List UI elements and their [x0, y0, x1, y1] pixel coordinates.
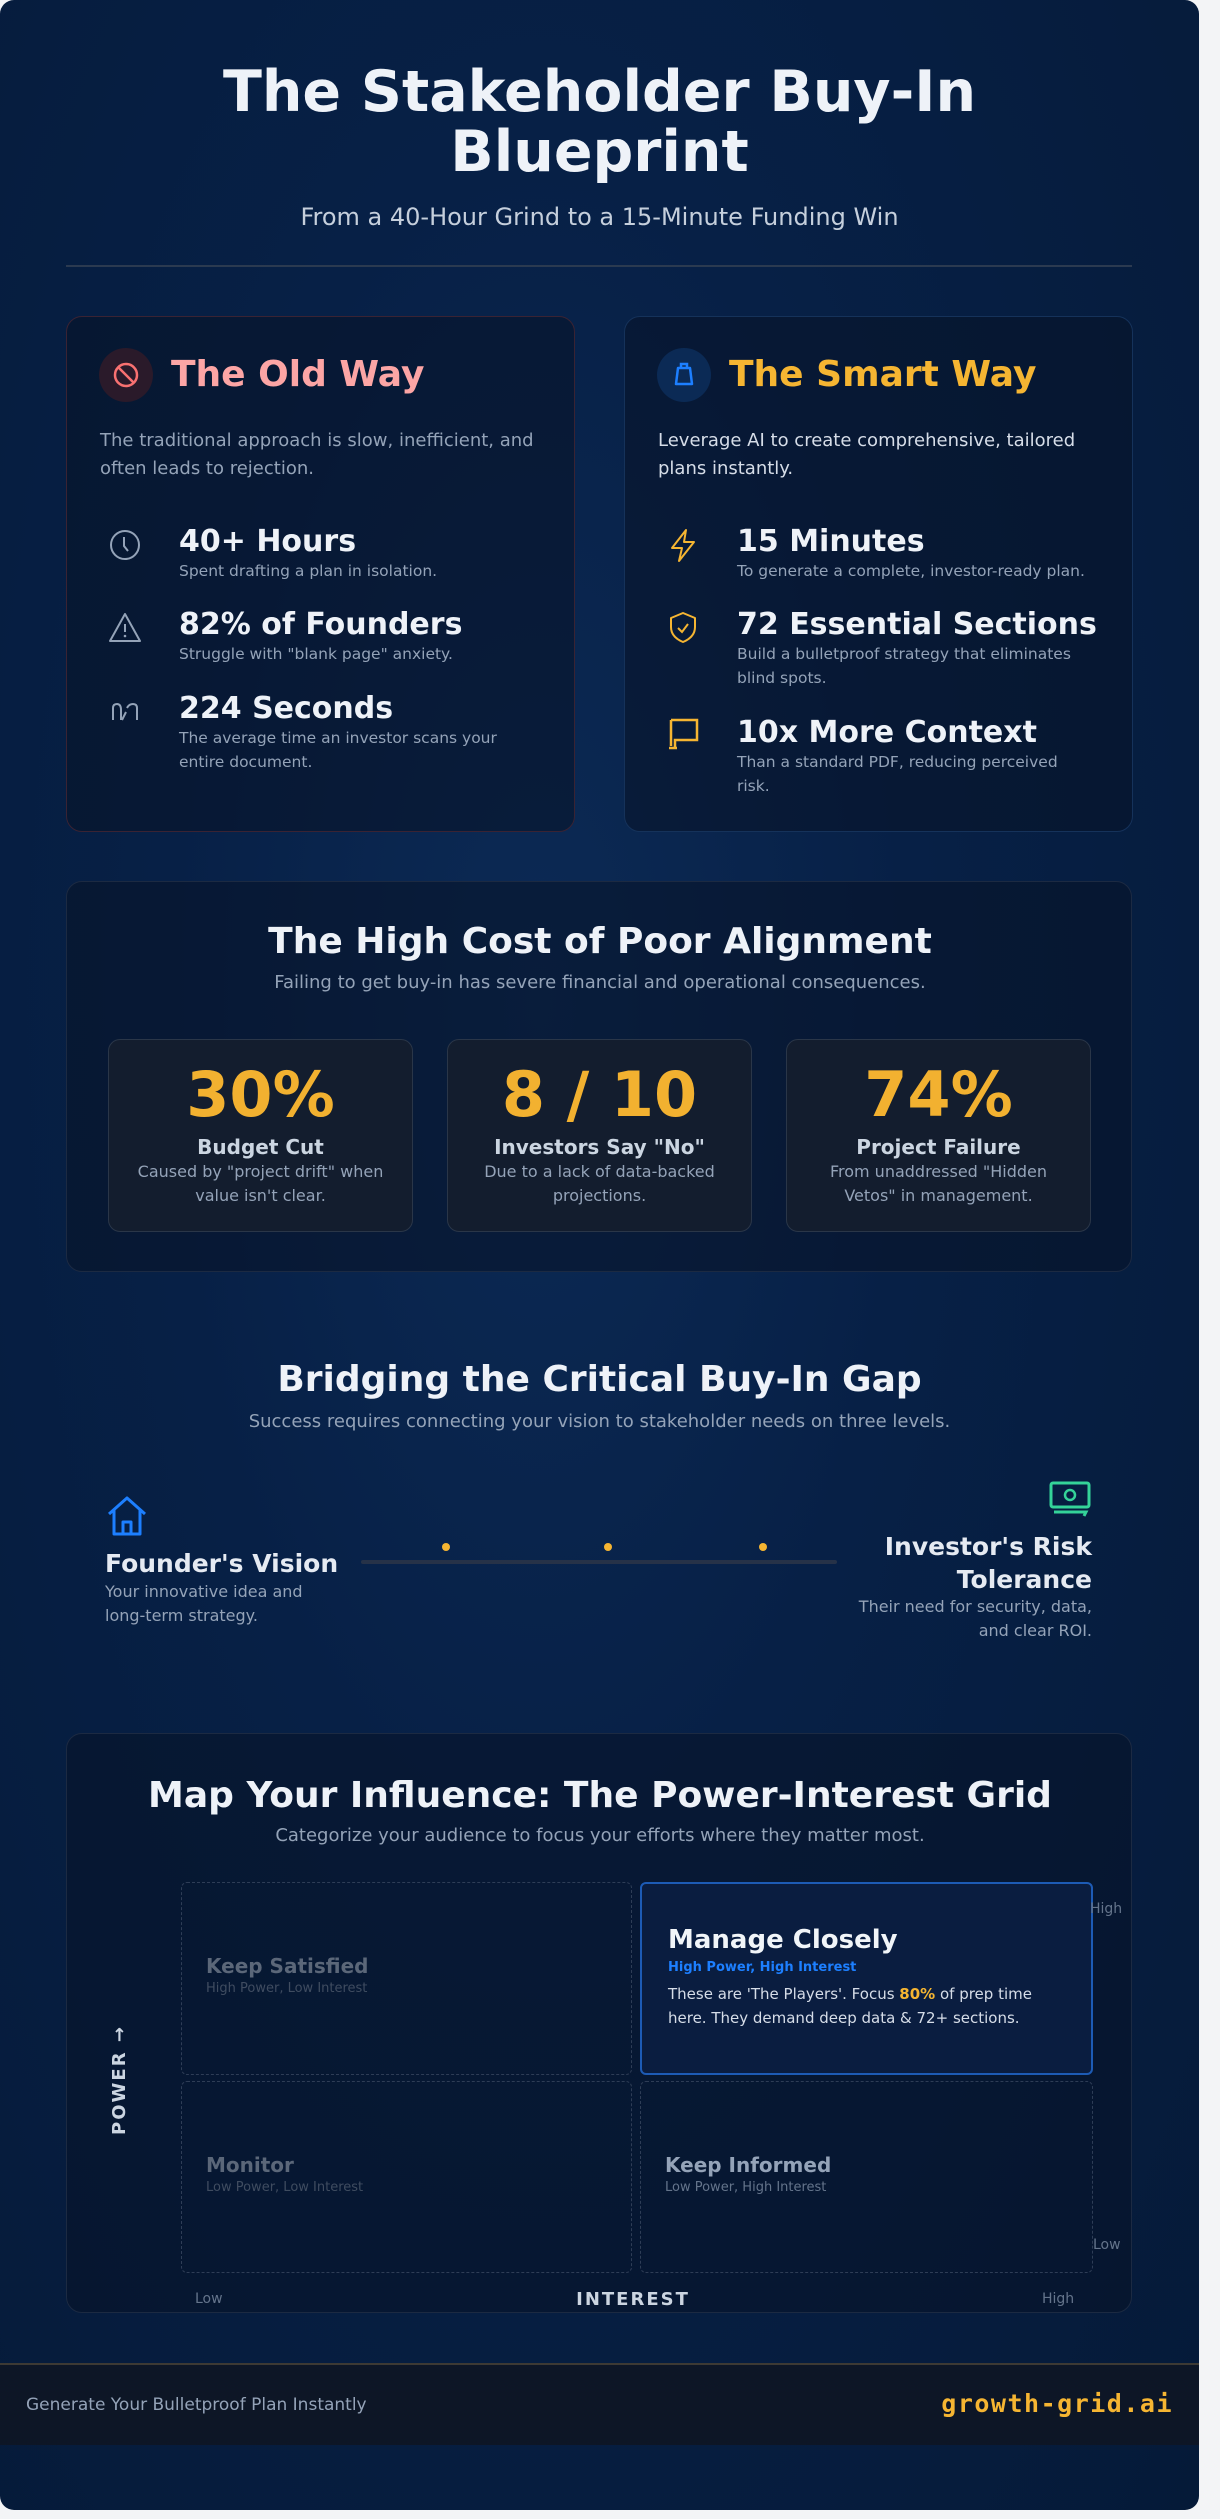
icon: money [1050, 1482, 1090, 1517]
stat: 30%: value isn't clear. [195, 1186, 326, 1205]
item: 15 minutes: 15 Minutes [737, 524, 925, 559]
block: investor's risk tolerance: Their need for security, data, and clear ROI. [859, 1597, 1092, 1640]
item: 82% of founders: Struggle with "blank page" anxiety. [179, 645, 453, 663]
stat: 30%: Budget Cut [197, 1135, 324, 1159]
item: 40+ hours [110, 524, 437, 580]
heading: the old way: The Old Way [171, 354, 424, 395]
footer [0, 2363, 1199, 2445]
item: 224 seconds: 224 Seconds [179, 691, 393, 726]
item: 82% of founders [109, 607, 462, 663]
subheading: bridging: Success requires connecting your vision to stakeholder needs on three levels. [249, 1411, 950, 1432]
panel: power-interest grid [66, 1733, 1132, 2313]
stat: 8/10: projections. [553, 1186, 646, 1205]
heading: the smart way: The Smart Way [729, 354, 1036, 395]
connector line with dots [361, 1543, 837, 1564]
icon: house [108, 1496, 146, 1536]
panel: power-interest grid: Low [1093, 2237, 1121, 2253]
quadrant: keep informed [640, 2081, 1093, 2273]
axis ticks: High [1090, 1901, 1122, 1917]
quadrant: monitor [181, 2081, 632, 2273]
stat: 74% [786, 1039, 1091, 1232]
axis label: power: POWER → [109, 2025, 130, 2135]
quadrant: monitor: Monitor [206, 2153, 294, 2177]
description: Leverage AI to create comprehensive, tailored plans instantly. [658, 430, 1075, 479]
item: 40+ hours: Spent drafting a plan in isolation. [179, 562, 437, 580]
stat: 74%: Project Failure [856, 1135, 1021, 1159]
title [223, 59, 976, 185]
item: 15 minutes [671, 524, 1085, 580]
stat: 30%: Caused by "project drift" when [138, 1162, 383, 1181]
stat: 8/10: 8 / 10 [502, 1058, 697, 1131]
axis label: interest: INTEREST [576, 2289, 690, 2310]
stat: 30%: 30% [186, 1058, 335, 1131]
panel: high cost of poor alignment [66, 881, 1132, 1272]
block: founder's vision: Founder's Vision [105, 1549, 338, 1578]
stat: 30% [108, 1039, 413, 1232]
block: founder's vision [105, 1496, 338, 1625]
block: founder's vision: Your innovative idea and long-term strategy. [105, 1582, 303, 1625]
quadrant: monitor: Low Power, Low Interest [206, 2180, 363, 2195]
heading: bridging the gap: Bridging the Critical Buy-In Gap [277, 1359, 922, 1400]
icon: bag [657, 348, 711, 402]
item: 10x context [669, 715, 1058, 795]
stat: 74%: From unaddressed "Hidden [830, 1162, 1047, 1181]
item: 15 minutes: To generate a complete, investor-ready plan. [737, 562, 1085, 580]
item: 72 sections: Build a bulletproof strategy that eliminates blind spots. [737, 645, 1071, 687]
subheading: Failing to get buy-in has severe financial and operational consequences. [274, 972, 926, 993]
panel: smart way [624, 316, 1133, 832]
block: investor's risk tolerance: Investor's Risk Tolerance [885, 1532, 1092, 1594]
description: The traditional approach is slow, inefficient, and often leads to rejection. [100, 430, 534, 479]
quadrant: manage closely: Manage Closely [668, 1925, 898, 1955]
stat: 74%: Vetos" in management. [844, 1186, 1033, 1205]
title: Blueprint [450, 119, 749, 185]
title: The Stakeholder Buy-In [223, 59, 976, 125]
stat: 8/10 [447, 1039, 752, 1232]
stat: 8/10: Due to a lack of data-backed [484, 1162, 715, 1181]
item: 82% of founders: 82% of Founders [179, 607, 462, 642]
stat: 74%: 74% [864, 1058, 1013, 1131]
quadrant: manage closely [640, 1882, 1093, 2075]
item: 10x context: Than a standard PDF, reducing perceived risk. [737, 753, 1058, 795]
footer text: Generate Your Bulletproof Plan Instantly [26, 2395, 367, 2415]
quadrant: keep satisfied: High Power, Low Interest [206, 1981, 367, 1996]
quadrant: keep informed: Keep Informed [665, 2153, 831, 2177]
panel: old way [66, 316, 575, 832]
subtitle: From a 40-Hour Grind to a 15-Minute Funding Win [300, 203, 899, 231]
panel: power-interest grid: Low [195, 2291, 223, 2307]
item: 72 sections: 72 Essential Sections [737, 607, 1097, 642]
quadrant: manage closely: These are 'The Players'. Focus 80% of prep time here. They demand deep data & 72+ sections. [668, 1985, 1032, 2027]
brand: growth-grid.ai [941, 2389, 1173, 2418]
item: 72 sections [670, 607, 1097, 687]
quadrant: keep satisfied: Keep Satisfied [206, 1954, 368, 1978]
item: 10x context: 10x More Context [737, 715, 1037, 750]
quadrant: manage closely: High Power, High Interest [668, 1960, 856, 1975]
block: investor's risk tolerance [858, 1482, 1092, 1640]
item: 40+ hours: 40+ Hours [179, 524, 356, 559]
item: 224 seconds [112, 691, 497, 771]
quadrant: keep informed: Low Power, High Interest [665, 2180, 826, 2195]
stat: 8/10: Investors Say "No" [494, 1135, 705, 1159]
icon: prohibited [99, 348, 153, 402]
quadrant: keep satisfied [181, 1882, 632, 2075]
subheading: Categorize your audience to focus your efforts where they matter most. [275, 1825, 925, 1846]
heading: The High Cost of Poor Alignment [268, 921, 932, 962]
item: 224 seconds: The average time an investor scans your entire document. [179, 729, 497, 771]
panel: power-interest grid: High [1042, 2291, 1074, 2307]
heading: Map Your Influence: The Power-Interest Grid [148, 1775, 1052, 1816]
